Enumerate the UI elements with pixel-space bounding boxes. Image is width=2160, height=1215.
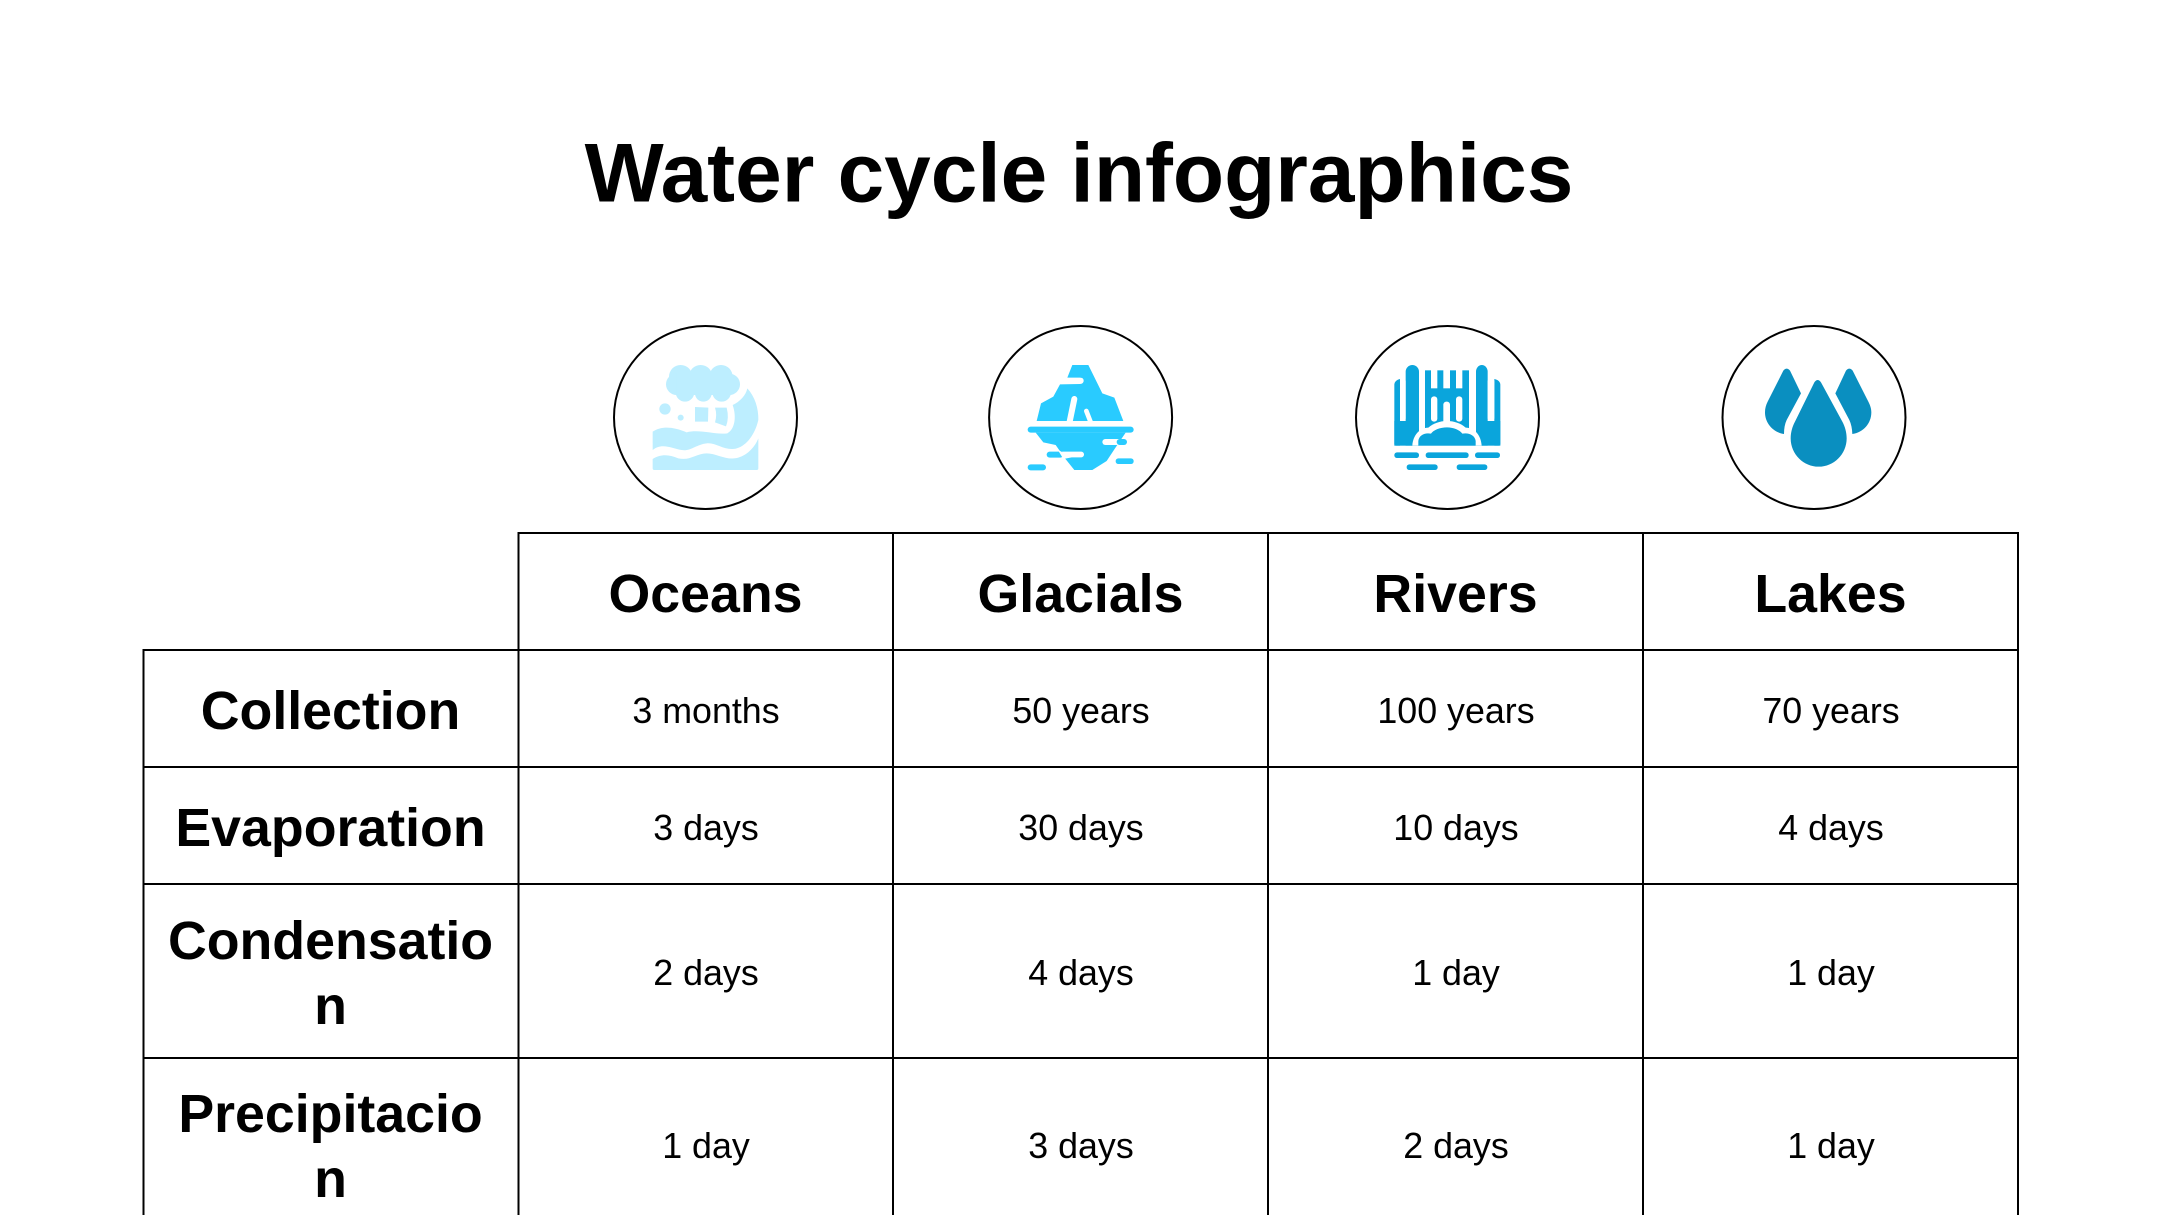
icon: iceberg (989, 326, 1172, 509)
row: condensation values: 4 days (1028, 953, 1134, 993)
column headers (608, 564, 1907, 624)
row: collection values: 50 years (1012, 691, 1150, 731)
row headers: Evaporation (175, 798, 486, 858)
row headers: Collection (201, 681, 460, 741)
row: precipitation values: 3 days (1028, 1126, 1134, 1166)
row headers: n (314, 1149, 347, 1209)
row: evaporation values: 30 days (1018, 808, 1144, 848)
row: precipitation values (662, 1126, 1875, 1166)
column headers: Lakes (1754, 564, 1907, 624)
column headers: Oceans (608, 564, 802, 624)
row: collection values (632, 691, 1900, 731)
icon: ocean wave (614, 326, 797, 509)
icon: river waterfall (1356, 326, 1539, 509)
row headers (168, 681, 493, 1209)
row headers: n (314, 976, 347, 1036)
row: precipitation values: 1 day (1787, 1126, 1875, 1166)
column headers: Rivers (1373, 564, 1538, 624)
table grid (144, 533, 2018, 1215)
row headers: Condensatio (168, 911, 493, 971)
row: collection values: 100 years (1377, 691, 1535, 731)
icon: water drops (1722, 326, 1906, 509)
row: precipitation values: 1 day (662, 1126, 750, 1166)
row: condensation values: 1 day (1787, 953, 1875, 993)
row headers: Precipitacio (178, 1084, 483, 1144)
row: precipitation values: 2 days (1403, 1126, 1509, 1166)
row: collection values: 3 months (632, 691, 780, 731)
row: condensation values: 1 day (1412, 953, 1500, 993)
column headers: Glacials (978, 564, 1183, 624)
row: evaporation values: 3 days (653, 808, 759, 848)
row: condensation values: 2 days (653, 953, 759, 993)
row: evaporation values: 4 days (1778, 808, 1884, 848)
title: Water cycle infographics (585, 126, 1573, 220)
row: collection values: 70 years (1762, 691, 1900, 731)
row: condensation values (653, 953, 1875, 993)
row: evaporation values (653, 808, 1884, 848)
row: evaporation values: 10 days (1393, 808, 1519, 848)
